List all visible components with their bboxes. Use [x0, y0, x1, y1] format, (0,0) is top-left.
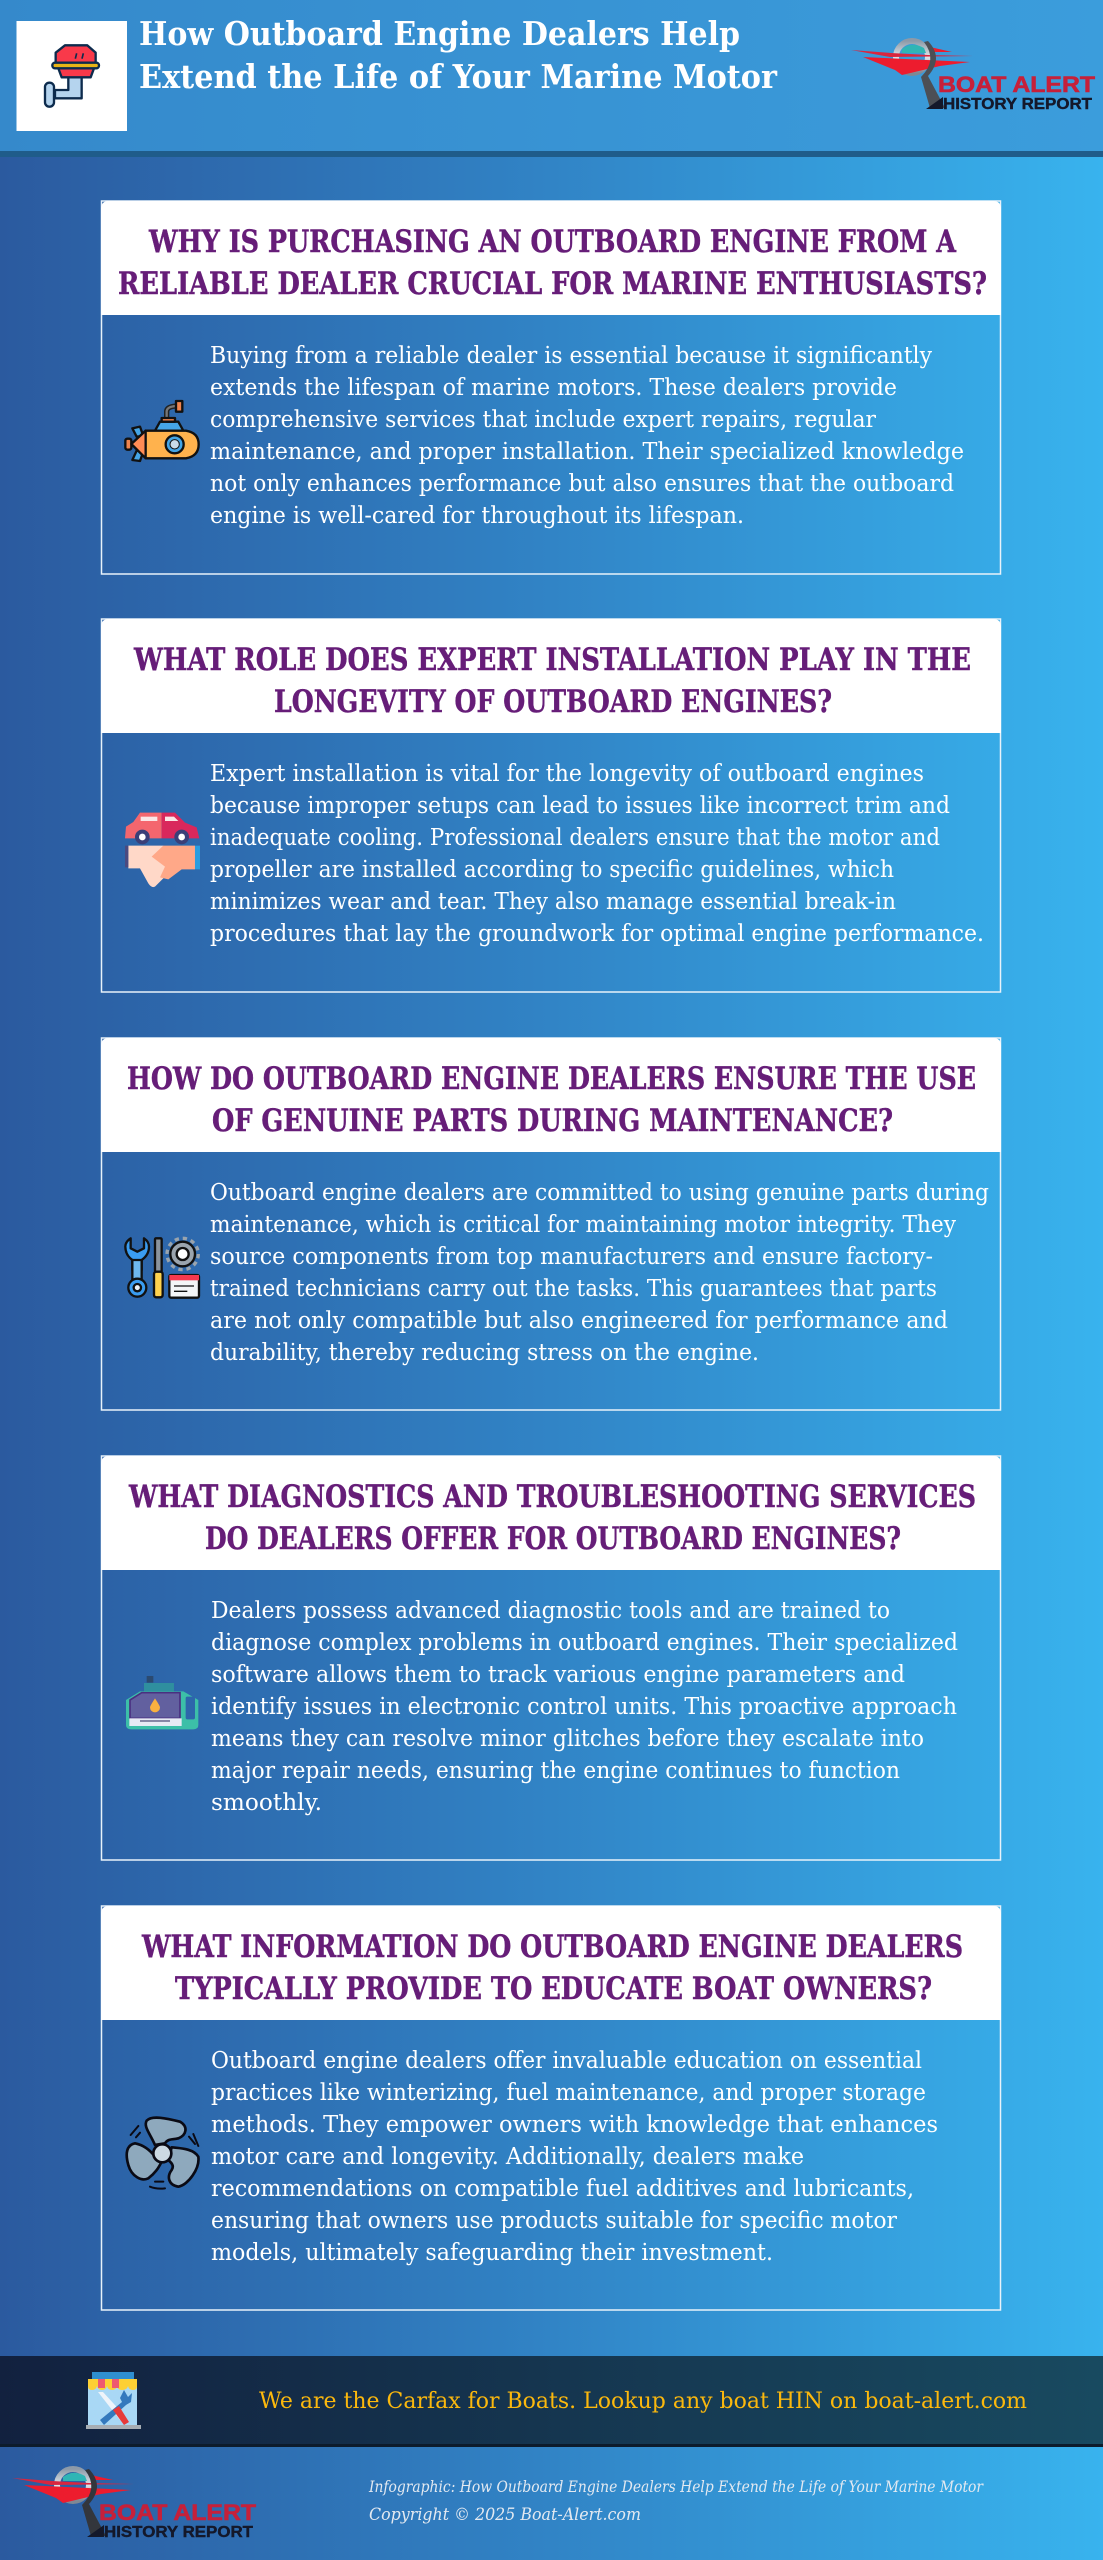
logo: Boat Alert History Report: BOAT ALERT	[938, 72, 1096, 97]
logo: Boat Alert History Report	[851, 41, 1096, 113]
footer	[12, 2469, 984, 2541]
body text: major repair needs, ensuring the engine continues to function	[211, 1756, 900, 1784]
heading: TYPICALLY PROVIDE TO EDUCATE BOAT OWNERS?	[175, 1971, 932, 2007]
icon: repair shop	[86, 2372, 141, 2429]
header banner	[0, 0, 1103, 157]
title: How Outboard Engine Dealers Help	[139, 14, 740, 53]
title: Extend the Life of Your Marine Motor	[139, 57, 778, 96]
heading	[101, 1038, 1001, 1152]
body text: Outboard engine dealers are committed to using genuine parts during	[210, 1178, 989, 1206]
body text: Expert installation is vital for the longevity of outboard engines	[210, 759, 924, 787]
body text	[210, 1178, 989, 1366]
panel: diagnostics	[101, 1456, 1001, 1860]
body text: recommendations on compatible fuel additives and lubricants,	[211, 2174, 914, 2202]
body text: Outboard engine dealers offer invaluable education on essential	[211, 2046, 922, 2074]
heading: WHY IS PURCHASING AN OUTBOARD ENGINE FROM A	[148, 224, 957, 260]
body text: diagnose complex problems in outboard engines. Their specialized	[211, 1628, 958, 1656]
body text: models, ultimately safeguarding their investment.	[211, 2238, 773, 2266]
body text	[211, 2046, 938, 2266]
body text: source components from top manufacturers and ensure factory-	[210, 1242, 933, 1270]
body text: Buying from a reliable dealer is essential because it significantly	[210, 341, 933, 369]
body text	[210, 759, 984, 947]
heading	[101, 619, 1001, 733]
panel: owner education	[101, 1906, 1001, 2310]
logo: Boat Alert History Report: HISTORY REPORT	[104, 2524, 254, 2541]
icon: submarine	[125, 401, 199, 461]
body text: practices like winterizing, fuel maintenance, and proper storage	[211, 2078, 926, 2106]
heading	[101, 1906, 1001, 2020]
body text: not only enhances performance but also ensures that the outboard	[210, 469, 954, 497]
body text: software allows them to track various engine parameters and	[211, 1660, 905, 1688]
body text: means they can resolve minor glitches before they escalate into	[211, 1724, 924, 1752]
body text: maintenance, and proper installation. Their specialized knowledge	[210, 437, 964, 465]
icon: propeller	[127, 2118, 198, 2189]
panel: why buy from a reliable dealer	[101, 201, 1001, 574]
icon: car and handshake	[125, 813, 200, 887]
body text: propeller are installed according to specific guidelines, which	[210, 855, 894, 883]
logo: Boat Alert History Report: BOAT ALERT	[99, 2500, 257, 2525]
panel: expert installation	[101, 619, 1001, 992]
body text: ensuring that owners use products suitable for specific motor	[211, 2206, 898, 2234]
body text: inadequate cooling. Professional dealers ensure that the motor and	[210, 823, 940, 851]
call to action bar	[0, 2356, 1103, 2447]
body text: engine is well-cared for throughout its lifespan.	[210, 501, 744, 529]
body text: trained technicians carry out the tasks. This guarantees that parts	[210, 1274, 937, 1302]
icon: outboard motor in white box	[16, 21, 127, 131]
body text: extends the lifespan of marine motors. These dealers provide	[210, 373, 897, 401]
heading	[101, 1456, 1001, 1570]
tagline: We are the Carfax for Boats. Lookup any boat HIN on boat-alert.com	[259, 2388, 1027, 2414]
body text: minimizes wear and tear. They also manage essential break-in	[210, 887, 896, 915]
body text: procedures that lay the groundwork for optimal engine performance.	[210, 919, 984, 947]
logo: Boat Alert History Report	[12, 2469, 257, 2541]
title	[139, 14, 778, 96]
body text: maintenance, which is critical for maintaining motor integrity. They	[210, 1210, 957, 1238]
heading: LONGEVITY OF OUTBOARD ENGINES?	[274, 684, 832, 720]
body text: are not only compatible but also engineered for performance and	[210, 1306, 948, 1334]
body text	[210, 341, 964, 529]
body text: smoothly.	[211, 1788, 322, 1816]
body text: methods. They empower owners with knowledge that enhances	[211, 2110, 938, 2138]
icon: tools and gear	[125, 1238, 199, 1298]
body text: identify issues in electronic control units. This proactive approach	[211, 1692, 957, 1720]
body text: Dealers possess advanced diagnostic tools and are trained to	[211, 1596, 890, 1624]
body text: comprehensive services that include expert repairs, regular	[210, 405, 877, 433]
body text: durability, thereby reducing stress on the engine.	[210, 1338, 759, 1366]
body text: motor care and longevity. Additionally, dealers make	[211, 2142, 804, 2170]
credit text: Copyright © 2025 Boat-Alert.com	[369, 2505, 641, 2525]
heading: DO DEALERS OFFER FOR OUTBOARD ENGINES?	[205, 1521, 901, 1557]
credit text: Infographic: How Outboard Engine Dealers Help Extend the Life of Your Marine Motor	[368, 2477, 984, 2496]
logo: Boat Alert History Report: HISTORY REPORT	[943, 96, 1093, 113]
body text: because improper setups can lead to issues like incorrect trim and	[210, 791, 950, 819]
icon: oil container	[126, 1676, 198, 1729]
credit text	[368, 2477, 984, 2525]
panel: genuine parts	[101, 1038, 1001, 1410]
heading: OF GENUINE PARTS DURING MAINTENANCE?	[212, 1103, 893, 1139]
body text	[211, 1596, 958, 1816]
heading	[101, 201, 1001, 315]
